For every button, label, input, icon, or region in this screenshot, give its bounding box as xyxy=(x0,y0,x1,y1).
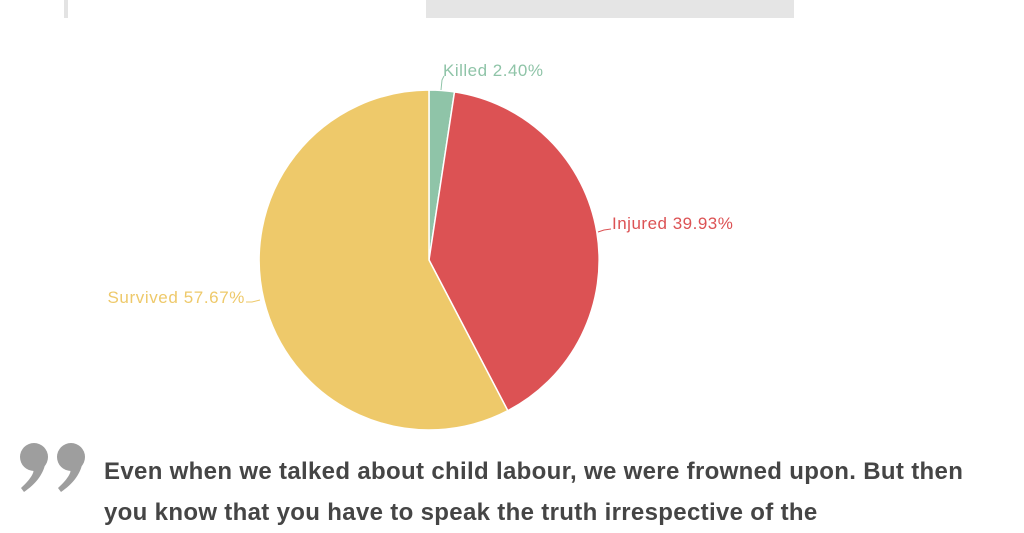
top grey block xyxy=(426,0,794,18)
slice: killed xyxy=(429,90,454,260)
label: injured: Injured 39.93% xyxy=(612,214,733,233)
slice: injured xyxy=(429,92,599,411)
quote text: Even when we talked about child labour, we were frowned upon. But then you know that you have to speak the truth irrespective of the xyxy=(104,458,963,526)
slice: survived xyxy=(259,90,508,430)
label: killed: Killed 2.40% xyxy=(443,61,544,80)
label: survived: Survived 57.67% xyxy=(107,288,245,307)
label: killed xyxy=(441,61,544,90)
icon: quote mark xyxy=(20,443,85,492)
top left divider bar xyxy=(64,0,68,18)
